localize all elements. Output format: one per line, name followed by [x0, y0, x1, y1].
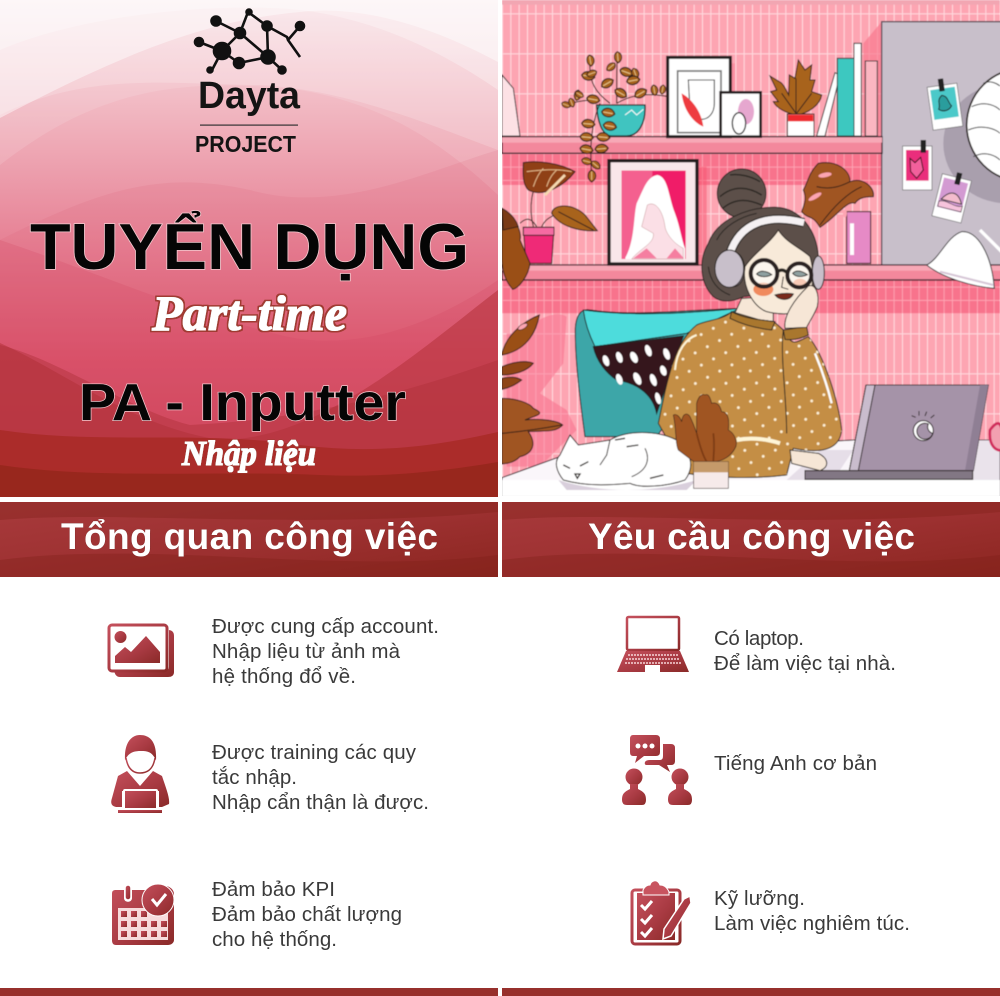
monstera in pink vase [802, 163, 873, 263]
icon: people conversing [622, 735, 692, 805]
hands [785, 286, 827, 471]
icon: laptop [617, 617, 689, 672]
wall [502, 0, 1000, 497]
large leaves on the left [502, 208, 563, 464]
panel header: job overview [0, 502, 498, 577]
bottom strip left [0, 988, 498, 996]
headphones [715, 219, 824, 289]
panel header: job requirements [502, 502, 1000, 577]
job title: PA - Inputter [79, 374, 406, 432]
glasses [751, 260, 811, 287]
subheading: part-time: Part-time [151, 285, 347, 341]
brown plant on desk [673, 395, 736, 488]
lower shelf [502, 265, 1000, 280]
desk lamp [927, 230, 1000, 288]
text: KPI and quality: Đảm bảo chất lượng [212, 903, 402, 926]
panel header: job overview: Tổng quan công việc [61, 516, 438, 557]
icon: calendar with clock [112, 884, 174, 945]
text: training: Được training các quy [212, 741, 417, 764]
left frame on shelf [502, 75, 520, 136]
chair [575, 308, 740, 437]
icon: picture gallery [109, 625, 174, 677]
wave background [0, 0, 498, 497]
text: account and data entry [212, 615, 439, 688]
text: diligence: Kỹ lưỡng. [714, 887, 805, 910]
text: account and data entry: Được cung cấp account. [212, 615, 439, 638]
sweater [658, 312, 842, 478]
books [817, 43, 877, 136]
upper shelf [502, 137, 882, 153]
text: account and data entry: hệ thống đổ về. [212, 665, 356, 688]
text: KPI and quality: cho hệ thống. [212, 928, 337, 951]
icon: checklist clipboard [632, 881, 691, 944]
logo wordmark: Dayta [198, 75, 301, 117]
text: account and data entry: Nhập liệu từ ảnh mà [212, 640, 401, 663]
text: training [212, 741, 429, 814]
brown plant on upper shelf [770, 60, 822, 136]
text: training: Nhập cẩn thận là được. [212, 791, 429, 814]
plant in pink pot [520, 162, 597, 263]
panel: illustration of girl working at desk [502, 0, 1000, 497]
job title translation: Nhập liệu [181, 434, 316, 473]
framed art [668, 57, 761, 137]
bottom strip right [502, 988, 1000, 996]
text: KPI and quality: Đảm bảo KPI [212, 878, 335, 901]
framed portrait [609, 161, 707, 265]
panel header: job requirements: Yêu cầu công việc [588, 516, 915, 557]
text: laptop requirement: Có laptop. [714, 627, 804, 650]
text: KPI and quality [212, 878, 402, 951]
text: diligence: Làm việc nghiêm túc. [714, 912, 910, 935]
neck and face [733, 230, 813, 322]
hanging plant in teal pot [561, 51, 668, 182]
sleeping cat [556, 432, 697, 490]
desk [502, 440, 1000, 497]
heading: recruitment: TUYỂN DỤNG [30, 210, 469, 283]
girl [658, 169, 842, 478]
logo subtitle: PROJECT [195, 131, 296, 157]
logo: Dayta Project [195, 10, 304, 157]
pin board [863, 22, 1000, 270]
hair [702, 169, 819, 301]
logo network icon [195, 10, 304, 74]
text: diligence [714, 887, 910, 935]
laptop [805, 385, 1000, 479]
text: basic English: Tiếng Anh cơ bản [714, 752, 877, 775]
text: laptop requirement: Để làm việc tại nhà. [714, 652, 896, 675]
text: training: tắc nhập. [212, 766, 297, 789]
text: laptop requirement [714, 627, 896, 675]
panel: job title cover [0, 0, 498, 497]
icon: person at laptop [111, 735, 169, 813]
